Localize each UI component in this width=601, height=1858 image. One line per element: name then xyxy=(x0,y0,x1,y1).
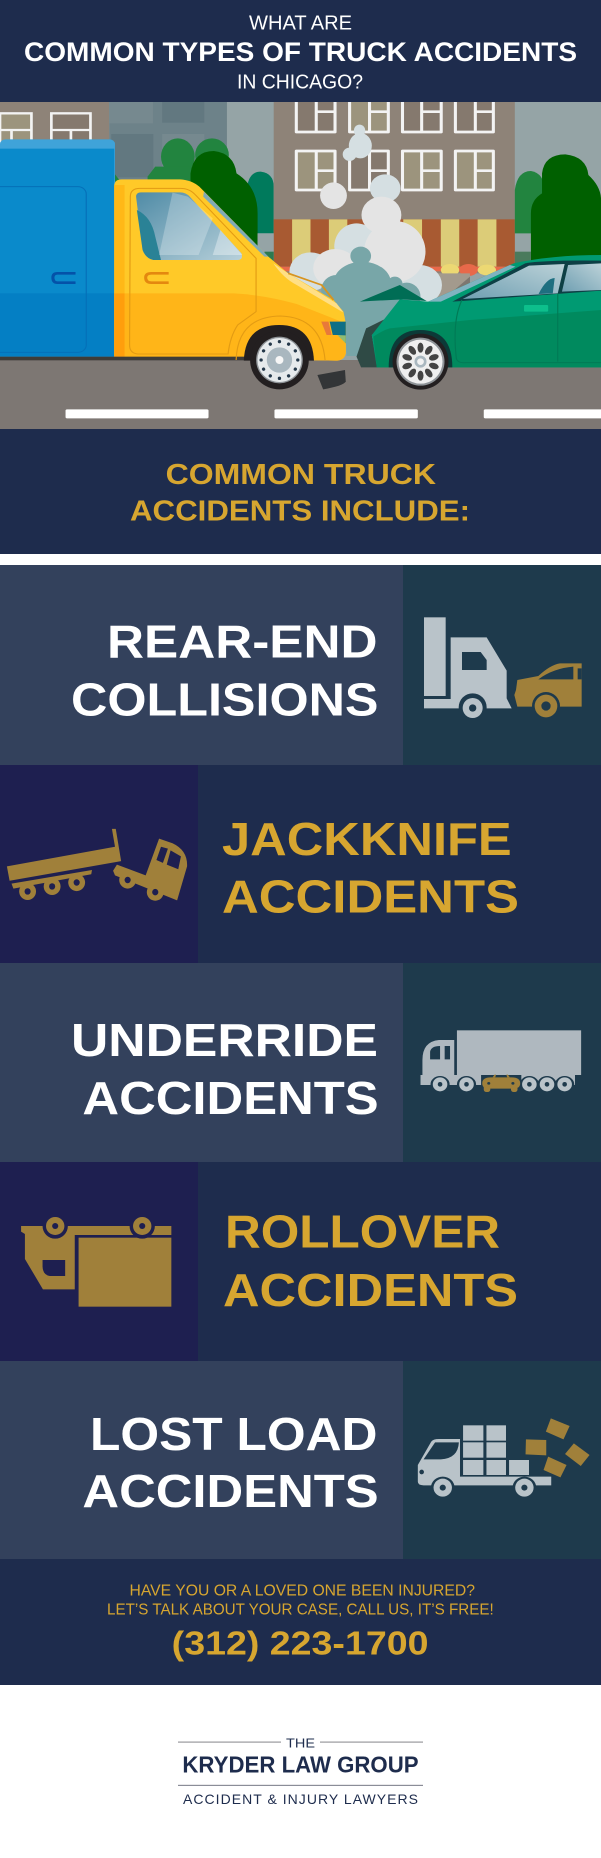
panel: jackknife accidents xyxy=(0,765,601,963)
trees left xyxy=(115,138,274,246)
main building with windows xyxy=(274,99,515,273)
heading: lost load accidents: ACCIDENTS xyxy=(82,1465,379,1517)
icon: truck losing cargo boxes xyxy=(418,1418,590,1499)
title line 2: COMMON TYPES OF TRUCK ACCIDENTS xyxy=(24,37,577,67)
heading: rear-end collisions xyxy=(71,616,378,726)
heading: lost load accidents: LOST LOAD xyxy=(90,1408,378,1460)
subheading line 1: COMMON TRUCK xyxy=(166,459,436,491)
smoke cloud xyxy=(289,125,470,305)
heading: underride accidents: ACCIDENTS xyxy=(82,1072,379,1124)
heading: underride accidents xyxy=(71,1014,379,1124)
logo: the: THE xyxy=(286,1735,315,1750)
trees right xyxy=(258,154,601,268)
subheading line 2: ACCIDENTS INCLUDE: xyxy=(130,496,470,528)
header band with title xyxy=(0,0,601,102)
title line 3: IN CHICAGO? xyxy=(237,71,363,93)
title line 1: WHAT ARE xyxy=(249,12,352,34)
icon: truck rear-ending car xyxy=(424,617,582,721)
call to action text xyxy=(107,1582,494,1618)
call to action band xyxy=(0,1559,601,1685)
road with lane markings xyxy=(0,360,601,429)
heading: lost load accidents xyxy=(82,1408,379,1517)
street backdrop xyxy=(0,100,601,367)
law firm logo xyxy=(178,1735,423,1807)
logo: tagline: ACCIDENT & INJURY LAWYERS xyxy=(183,1791,418,1807)
heading: rear-end collisions: REAR-END xyxy=(107,616,378,668)
call to action text: LET’S TALK ABOUT YOUR CASE, CALL US, IT’S FREE! xyxy=(107,1601,494,1618)
heading: rollover accidents: ACCIDENTS xyxy=(223,1264,518,1316)
subheading band xyxy=(0,429,601,554)
heading: rollover accidents: ROLLOVER xyxy=(225,1206,500,1258)
heading: rear-end collisions: COLLISIONS xyxy=(71,674,378,726)
panel: rear-end collisions xyxy=(0,565,601,765)
logo: firm name: KRYDER LAW GROUP xyxy=(182,1751,419,1777)
loose bumper debris xyxy=(317,370,346,389)
icon: jackknifed truck xyxy=(7,829,187,901)
phone number: (312) 223-1700 xyxy=(172,1624,428,1661)
heading: jackknife accidents xyxy=(222,813,519,922)
heading: underride accidents: UNDERRIDE xyxy=(71,1014,378,1066)
teal impact smoke xyxy=(321,247,421,356)
awning xyxy=(274,219,515,276)
call to action text: HAVE YOU OR A LOVED ONE BEEN INJURED? xyxy=(130,1582,475,1599)
panel: rollover accidents xyxy=(0,1162,601,1361)
yellow delivery truck xyxy=(0,139,346,389)
hero illustration: truck and car collision xyxy=(0,99,601,429)
heading: rollover accidents xyxy=(223,1206,518,1316)
heading: jackknife accidents: JACKKNIFE xyxy=(222,813,512,865)
green car xyxy=(356,255,601,390)
panel: lost load accidents xyxy=(0,1361,601,1559)
icon: car under truck trailer xyxy=(421,1030,581,1093)
panel: underride accidents xyxy=(0,963,601,1162)
heading: jackknife accidents: ACCIDENTS xyxy=(222,870,519,922)
icon: overturned truck xyxy=(21,1213,171,1307)
